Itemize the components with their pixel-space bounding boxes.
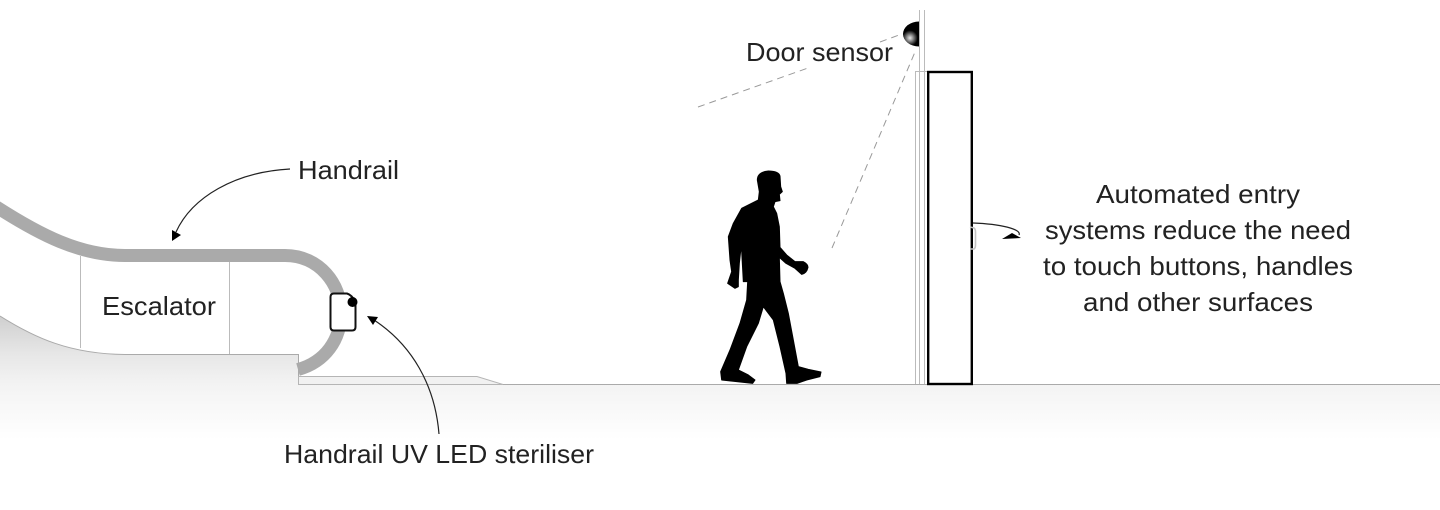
label: door sensor: Door sensor	[746, 37, 893, 67]
text block: automated entry: systems reduce the need	[1045, 215, 1351, 245]
ground and escalator base	[0, 316, 1440, 445]
handrail	[0, 206, 341, 370]
label: UV LED steriliser: Handrail UV LED steriliser	[284, 439, 594, 469]
text block: automated entry: Automated entry	[1096, 179, 1300, 209]
arrow: handrail	[172, 169, 290, 241]
door	[928, 72, 972, 384]
icon: UV LED steriliser	[330, 294, 358, 330]
icon: door handle	[970, 227, 976, 249]
escalator landing ramp	[298, 376, 503, 384]
icon: walking person	[721, 171, 821, 383]
label: handrail: Handrail	[298, 155, 399, 185]
arrow: door handle	[973, 223, 1021, 239]
text block: automated entry: and other surfaces	[1083, 287, 1313, 317]
arrow: steriliser	[367, 316, 439, 434]
door sensor beams	[698, 35, 915, 248]
text block: automated entry	[1043, 179, 1353, 317]
escalator panel lines	[80, 256, 230, 354]
label: escalator: Escalator	[102, 291, 216, 321]
door frame	[916, 10, 928, 384]
icon: door sensor	[903, 22, 919, 46]
text block: automated entry: to touch buttons, handles	[1043, 251, 1353, 281]
